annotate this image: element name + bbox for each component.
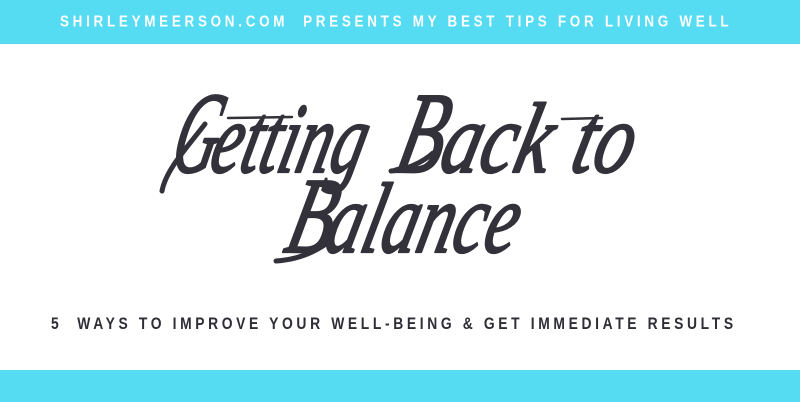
title line 2 [276,155,534,276]
word: Getting [162,70,382,198]
panel: top cyan banner [0,0,800,44]
word: Balance: B [276,155,352,276]
title line 1 [162,70,650,198]
word: Back: B [386,70,464,198]
panel: bottom cyan banner [0,370,800,402]
word: Getting: G [162,70,238,198]
word: Back: ack [432,83,569,194]
subtitle: 5 WAYS TO IMPROVE YOUR WELL-BEING & GET IMMEDIATE RESULTS [51,315,733,333]
decorative swash [276,244,326,261]
word: Balance [276,155,534,276]
banner text: SHIRLEYMEERSON.COM PRESENTS MY BEST TIPS FOR LIVING WELL [60,14,729,31]
word: to: to [563,83,650,194]
word: Back [386,70,569,198]
title [162,70,650,276]
t crossbars [228,117,602,119]
decorative swashes [162,124,433,191]
word: Balance: alance [317,163,534,274]
word: Getting: etting [202,83,382,194]
